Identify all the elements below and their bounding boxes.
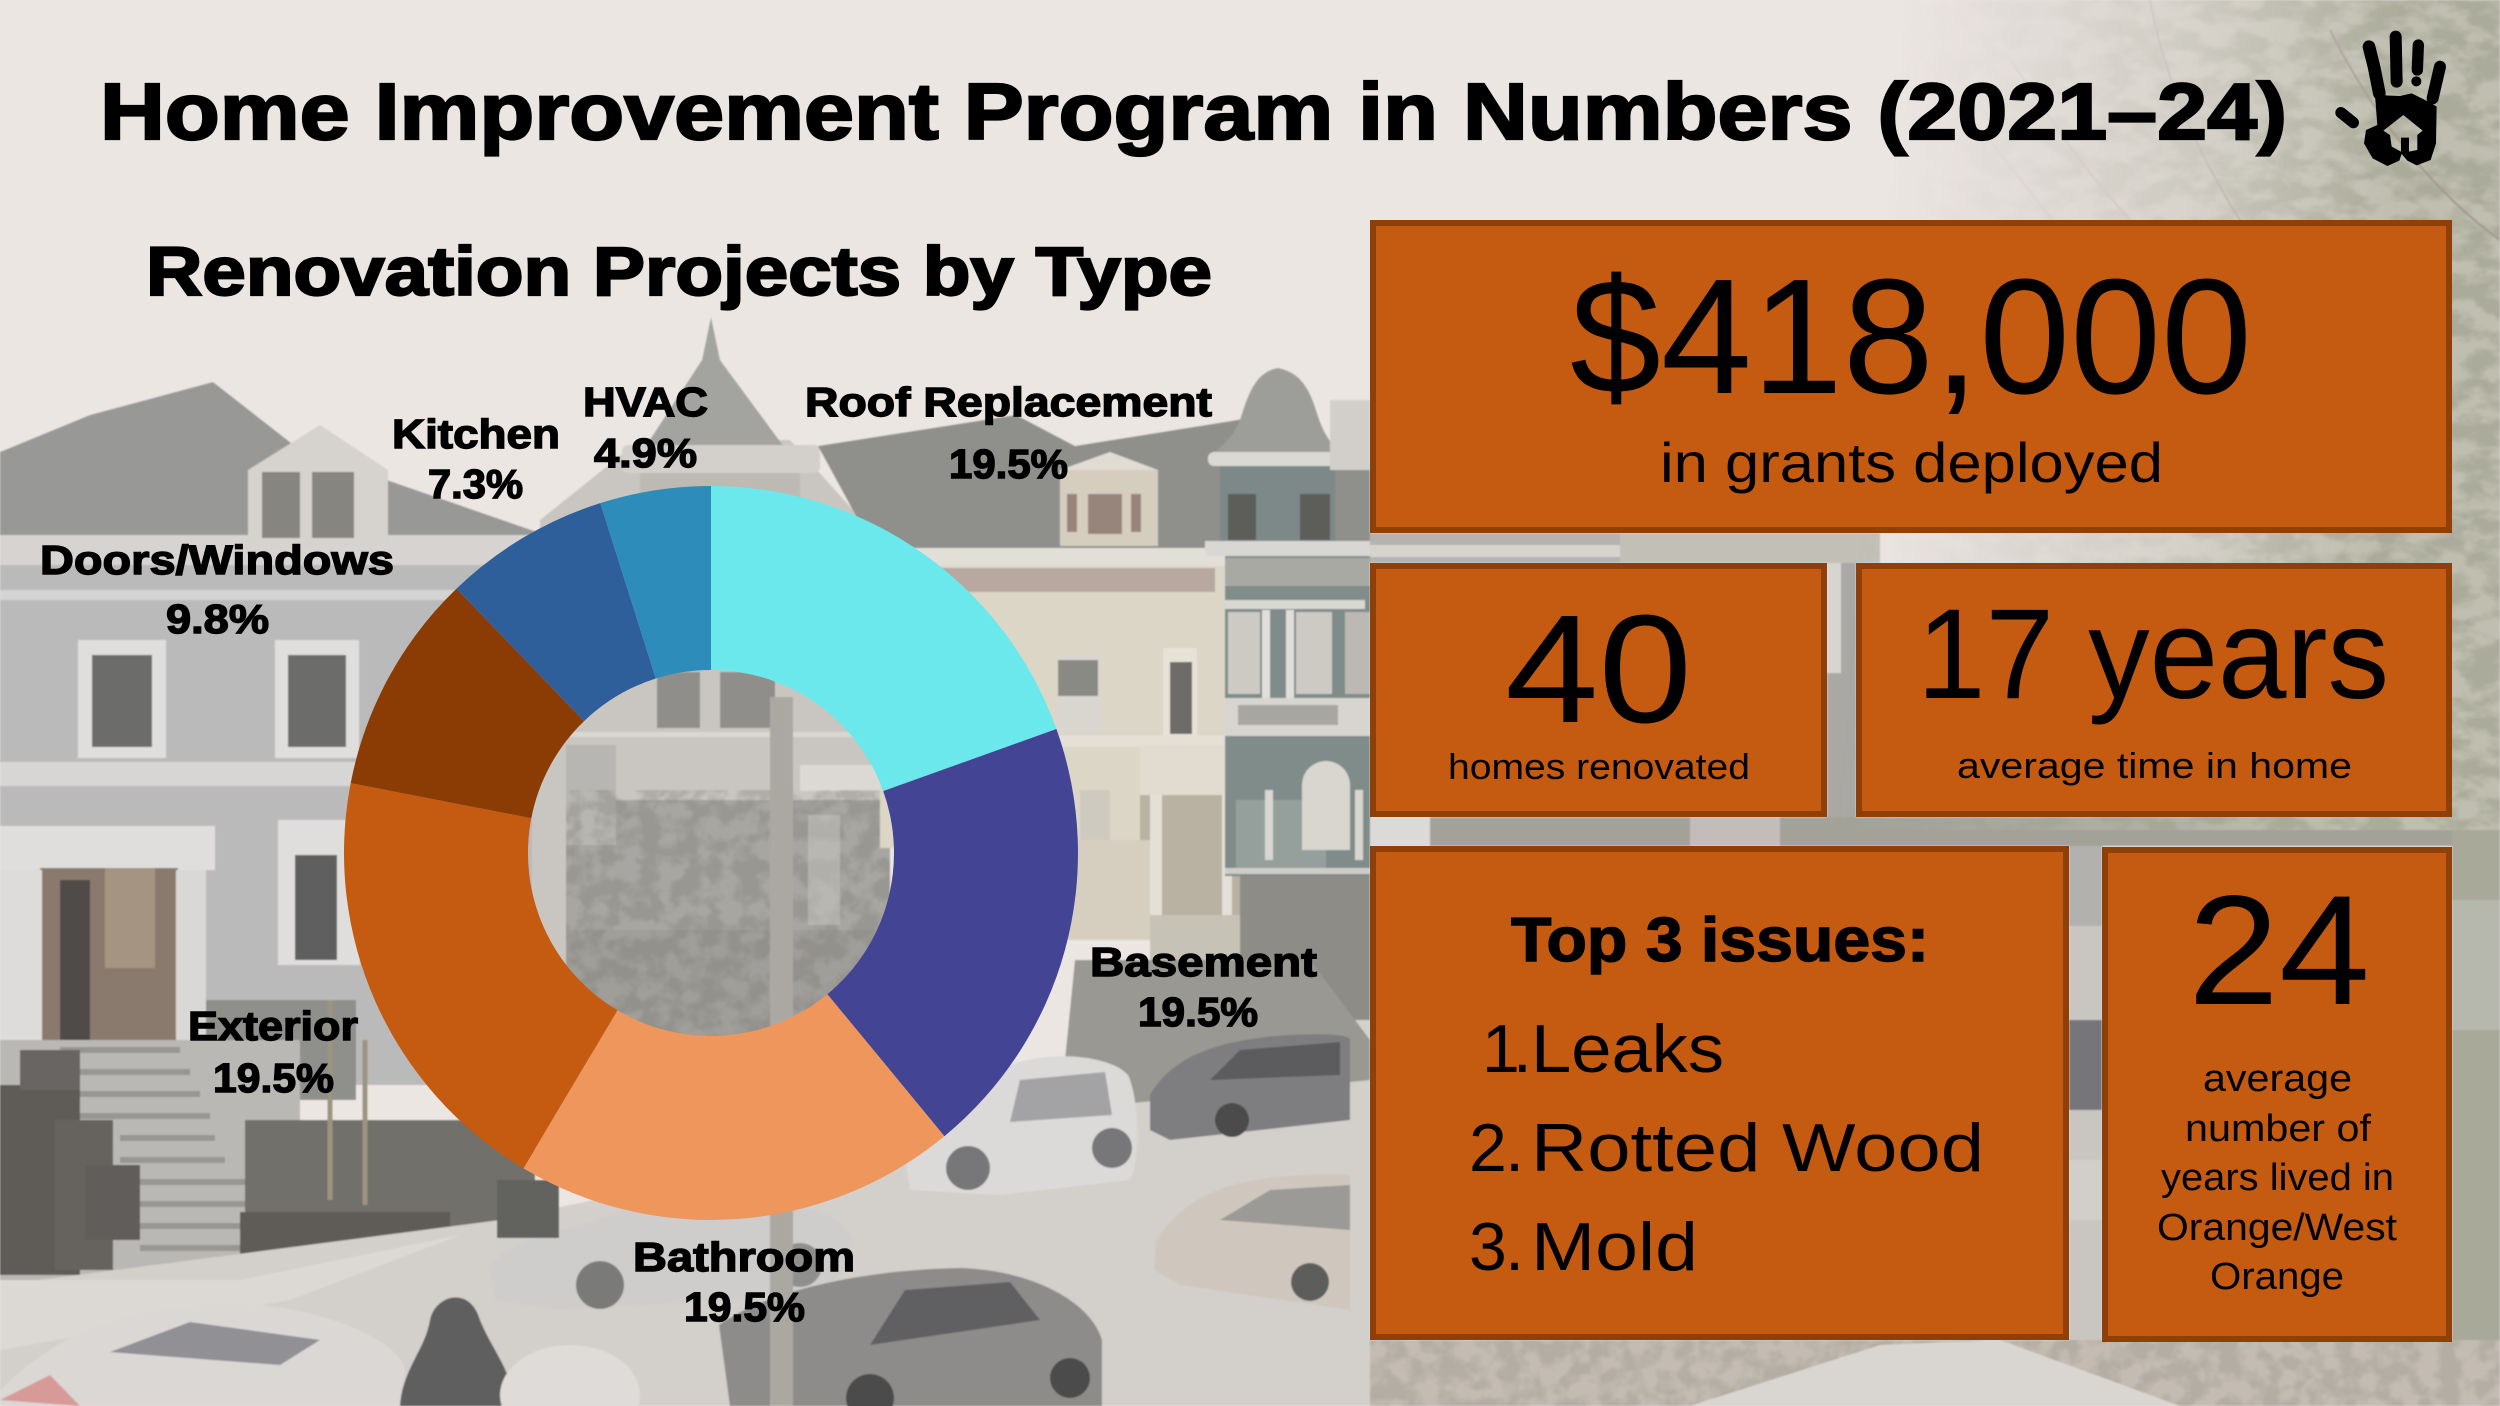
title: Home Improvement Program in Numbers (2021–24) [100, 67, 2287, 156]
stat: $418,000: $418,000 [1570, 245, 2252, 428]
label: kitchen: Kitchen [392, 411, 560, 457]
bottom-right ground [1370, 1340, 2500, 1406]
cars on the street [904, 1056, 1137, 1195]
slice: HVAC [600, 486, 711, 678]
caption: average number of years lived: years lived in [2161, 1157, 2394, 1199]
label: basement [1090, 939, 1317, 1035]
donut chart: renovation projects by type [344, 486, 1078, 1220]
label: bathroom [633, 1234, 855, 1330]
caption: in grants deployed: in grants deployed [1660, 431, 2163, 494]
label: HVAC [583, 379, 708, 476]
label: HVAC: 4.9% [594, 430, 697, 476]
tree foliage on the right [1934, 0, 2500, 830]
slice: bathroom [523, 994, 944, 1220]
teal house with corner turret [1225, 556, 1370, 876]
panel: homes renovated [1373, 566, 1824, 814]
right house: roof, dormer, cream facade [818, 415, 1370, 560]
label: doors and windows: 9.8% [166, 596, 269, 642]
list item: mold: 3. [1469, 1209, 1524, 1285]
slice: basement [827, 729, 1078, 1136]
stat: 40: 40 [1505, 583, 1692, 755]
panel: grants deployed [1373, 223, 2449, 530]
heading: top 3 issues: Top 3 issues: [1511, 906, 1929, 975]
label: bathroom: 19.5% [684, 1284, 805, 1330]
label: doors and windows: Doors/Windows [40, 537, 394, 583]
label: basement: Basement [1090, 939, 1317, 985]
label: kitchen [392, 411, 560, 507]
slice: roof replacement [711, 486, 1056, 791]
mid-right strips of houses visible between panels [1370, 533, 1830, 563]
pedestrian and utility pole [400, 1297, 515, 1406]
panel: top 3 issues [1373, 849, 2066, 1337]
section heading: renovation projects by type: Renovation Projects by Type [146, 233, 1212, 310]
label: roof replacement [805, 379, 1212, 487]
panel: years lived in Orange/West Orange [2105, 850, 2449, 1339]
caption: average number of years lived: Orange [2210, 1256, 2344, 1298]
label: kitchen: 7.3% [428, 461, 523, 507]
caption: average number of years lived: Orange/West [2157, 1207, 2397, 1249]
list item: leaks: 1. [1482, 1011, 1526, 1087]
centre house: turret, roof, siding [540, 440, 880, 720]
caption: average number of years lived: number of [2185, 1108, 2371, 1150]
list item: rotted wood: 2. [1469, 1110, 1524, 1186]
left house: roof, dormer, facade [0, 382, 560, 575]
panel: average time in home [1859, 566, 2449, 814]
caption: average number of years lived [2157, 1058, 2397, 1298]
slice: exterior [344, 783, 618, 1168]
street and pavement [0, 1010, 1370, 1406]
slice: doors and windows [351, 589, 584, 818]
label: HVAC: HVAC [583, 379, 708, 425]
caption: average number of years lived: average [2203, 1058, 2352, 1100]
caption: homes renovated: homes renovated [1448, 746, 1750, 787]
left house: stairs and planters [0, 1040, 300, 1280]
label: roof replacement: Roof Replacement [805, 379, 1212, 425]
label: doors and windows [40, 537, 394, 642]
label: bathroom: Bathroom [633, 1234, 855, 1280]
label: roof replacement: 19.5% [949, 441, 1068, 487]
list item: leaks: Leaks [1531, 1011, 1724, 1087]
icon: handprint with house cut-out [2341, 37, 2440, 166]
stat: 17 years: 17 years [1917, 583, 2389, 726]
slice: kitchen [456, 503, 656, 721]
label: exterior [188, 1003, 358, 1101]
caption: average time in home: average time in home [1957, 745, 2352, 786]
list item: rotted wood: Rotted Wood [1531, 1110, 1984, 1186]
stat: 24: 24 [2188, 864, 2370, 1038]
label: exterior: 19.5% [213, 1055, 334, 1101]
label: exterior: Exterior [188, 1003, 358, 1049]
label: basement: 19.5% [1138, 989, 1258, 1035]
list item: mold: Mold [1531, 1209, 1698, 1285]
list item: mold [1469, 1209, 1698, 1285]
